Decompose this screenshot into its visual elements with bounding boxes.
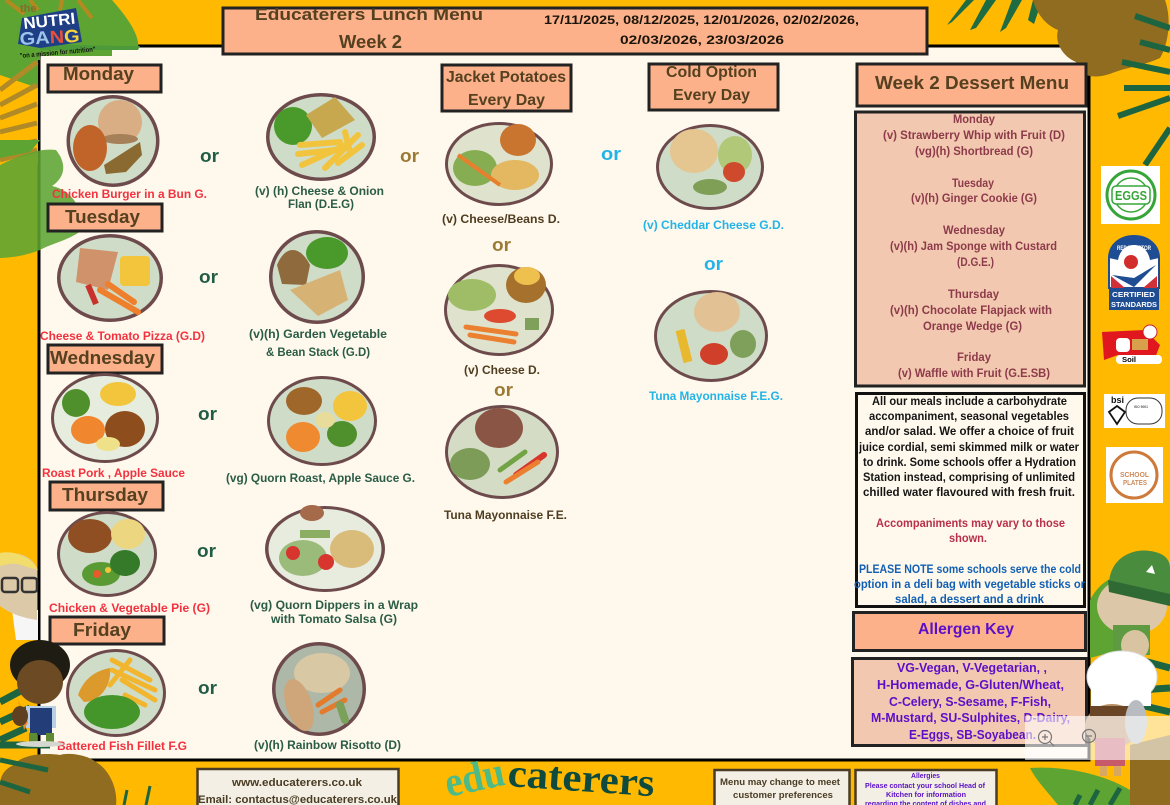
plate: cheese and beans potato xyxy=(445,122,553,206)
panel: dessert list: Thursday xyxy=(948,289,1000,301)
icon: school plates badge: SCHOOL xyxy=(1120,472,1150,479)
footer: menu note: customer preferences xyxy=(733,790,833,800)
heading: Jacket Potatoes: Every Day xyxy=(468,92,545,109)
menu dates: 17/11/2025, 08/12/2025, 12/01/2026, 02/02/2026, xyxy=(544,13,859,27)
panel: dessert list: (v) Strawberry Whip with Fruit (D) xyxy=(883,130,1065,142)
panel: allergen list: VG-Vegan, V-Vegetarian, , xyxy=(897,660,1047,675)
label: battered fish fillet: Battered Fish Fillet F.G xyxy=(57,739,187,753)
icon: zoom out xyxy=(1082,730,1096,742)
plate: chicken and vegetable pie xyxy=(57,511,157,597)
label: quorn dippers: (vg) Quorn Dippers in a Wrap xyxy=(250,598,418,612)
heading: Thursday xyxy=(50,482,163,510)
panel: allergen list: E-Eggs, SB-Soyabean. xyxy=(909,727,1036,742)
logo: the Nutri Gang: NUTRI xyxy=(23,11,76,33)
logo: the Nutri Gang: "on a mission for nutrition" xyxy=(20,46,96,60)
label: garden vegetable stack xyxy=(249,327,387,359)
heading: Wednesday: Wednesday xyxy=(50,348,155,368)
panel: meal information: All our meals include a carbohydrate xyxy=(872,396,1067,408)
label: chicken and vegetable pie: Chicken & Vegetable Pie (G) xyxy=(49,601,210,615)
or: or xyxy=(198,678,217,698)
or: or xyxy=(400,146,419,166)
panel: dessert list: Tuesday xyxy=(952,178,995,190)
label: cheese and beans: (v) Cheese/Beans D. xyxy=(442,212,560,226)
panel: meal information: Station instead, comprising of unlimited xyxy=(863,472,1075,484)
label: roast pork: Roast Pork , Apple Sauce xyxy=(42,466,185,480)
panel: dessert list: (v)(h) Ginger Cookie (G) xyxy=(911,193,1037,205)
footer: allergies note: Kitchen for information xyxy=(886,790,966,799)
panel: allergen list xyxy=(852,658,1086,746)
panel: dessert list: (v)(h) Chocolate Flapjack with xyxy=(890,305,1052,317)
label: garden vegetable stack: & Bean Stack (G.D) xyxy=(266,345,370,359)
panel: dessert list: (vg)(h) Shortbread (G) xyxy=(915,146,1033,158)
week label: Week 2 xyxy=(339,32,402,52)
plate: chicken burger xyxy=(66,95,160,187)
heading: Cold Option: Every Day xyxy=(673,87,750,104)
logo: the Nutri Gang: GANG xyxy=(19,26,80,49)
icon: red tractor badge: RED TRACTOR xyxy=(1117,246,1152,252)
icon: food for life badge xyxy=(1102,325,1162,364)
label: garden vegetable stack: (v)(h) Garden Vegetable xyxy=(249,327,387,341)
panel: meal information: accompaniment, seasonal vegetables xyxy=(869,411,1069,423)
heading: Jacket Potatoes: Jacket Potatoes xyxy=(446,69,566,86)
panel: dessert list: Orange Wedge (G) xyxy=(923,321,1022,333)
label: tuna potato: Tuna Mayonnaise F.E. xyxy=(444,508,567,522)
panel: allergen list: C-Celery, S-Sesame, F-Fish, xyxy=(889,694,1051,709)
panel: meal information: and/or salad. We offer a choice of fruit xyxy=(865,426,1074,438)
decoration: top left tropical leaves xyxy=(0,0,140,258)
panel: dessert list: Friday xyxy=(957,352,992,364)
plate: cheese and onion flan xyxy=(266,93,376,181)
heading: Wednesday xyxy=(48,345,162,373)
heading: allergen key: Allergen Key xyxy=(918,621,1014,638)
label: chicken burger: Chicken Burger in a Bun G. xyxy=(52,187,207,201)
logo: the Nutri Gang: the xyxy=(20,3,36,15)
panel: dessert list: (D.G.E.) xyxy=(957,257,994,269)
plate: battered fish fillet xyxy=(66,649,166,737)
heading: Friday xyxy=(50,617,164,644)
decoration: bottom left leaves xyxy=(0,686,150,805)
or: or xyxy=(494,380,513,400)
menu dates: 02/03/2026, 23/03/2026 xyxy=(620,33,784,47)
plate: cheddar cheese roll xyxy=(656,124,764,210)
panel: meal information: salad, a dessert and a drink xyxy=(895,594,1045,606)
icon: red tractor badge: STANDARDS xyxy=(1111,300,1157,309)
panel: meal information: Accompaniments may vary to those xyxy=(876,518,1065,530)
icon: food for life badge: Soil xyxy=(1122,357,1136,364)
panel: meal information: option in a deli bag with vegetable sticks or xyxy=(854,579,1086,591)
or: or xyxy=(199,267,218,287)
label: cheese potato: (v) Cheese D. xyxy=(464,363,540,377)
plate: quorn dippers xyxy=(265,505,385,592)
overlay: zoom controls xyxy=(1025,716,1170,760)
decoration: bottom right leaves xyxy=(1030,576,1170,805)
heading: Monday: Monday xyxy=(63,64,134,84)
logo: the Nutri Gang xyxy=(18,3,96,60)
label: quorn dippers xyxy=(250,598,418,626)
icon: free range eggs badge xyxy=(1101,166,1160,224)
logo: educaterers: caterers xyxy=(506,750,656,805)
menu dates xyxy=(544,13,859,47)
heading: dessert menu xyxy=(857,64,1086,106)
panel: dessert list: (v) Waffle with Fruit (G.E.SB) xyxy=(898,368,1050,380)
label: cheddar cheese: (v) Cheddar Cheese G.D. xyxy=(643,218,784,232)
plate: roast pork xyxy=(51,373,159,463)
panel: meal information: chilled water flavoured with fresh fruit. xyxy=(863,487,1075,499)
panel: meal information: shown. xyxy=(949,533,987,545)
plate: tuna potato xyxy=(445,405,559,499)
or: or xyxy=(601,144,621,164)
character: blond child xyxy=(0,552,38,640)
label: cheese and onion flan: (v) (h) Cheese & Onion xyxy=(255,184,384,198)
heading: Tuesday: Tuesday xyxy=(65,207,140,227)
plate: tuna roll xyxy=(654,290,768,382)
or: or xyxy=(200,146,219,166)
label: tuna mayonnaise: Tuna Mayonnaise F.E.G. xyxy=(649,389,783,403)
panel: dessert list xyxy=(856,112,1084,386)
icon: free range eggs badge: EGGS xyxy=(1115,188,1147,203)
heading: Monday xyxy=(48,64,161,92)
heading: Cold Option xyxy=(649,64,778,110)
panel: dessert list: Wednesday xyxy=(943,225,1006,237)
icon: school plates badge: PLATES xyxy=(1123,480,1147,487)
icon: red tractor badge: CERTIFIED xyxy=(1112,290,1156,299)
character: chef child xyxy=(1085,651,1157,776)
heading: Friday: Friday xyxy=(73,620,131,640)
panel: main menu background xyxy=(39,46,1089,760)
heading: Cold Option: Cold Option xyxy=(666,64,757,81)
panel: meal information: to drink. Some schools offer a Hydration xyxy=(863,457,1076,469)
panel: meal information: juice cordial, semi skimmed milk or water xyxy=(858,442,1080,454)
character: boy with carrot xyxy=(10,640,70,747)
label: rainbow risotto: (v)(h) Rainbow Risotto (D) xyxy=(254,738,401,752)
footer: website and email: www.educaterers.co.uk xyxy=(231,777,363,789)
footer: allergies note: Allergies xyxy=(911,771,940,780)
heading: dessert menu: Week 2 Dessert Menu xyxy=(875,72,1069,93)
or: or xyxy=(492,235,511,255)
heading: Tuesday xyxy=(48,204,162,231)
plate: cheese potato xyxy=(444,264,554,356)
character: boy with green cap xyxy=(1097,551,1170,660)
footer: allergies note xyxy=(856,770,996,805)
heading: Thursday: Thursday xyxy=(62,485,148,505)
panel: meal information xyxy=(854,394,1086,606)
logo: educaterers xyxy=(441,749,656,805)
heading: Jacket Potatoes xyxy=(442,65,571,111)
decoration: top right leaves xyxy=(947,0,1170,165)
icon: red tractor badge xyxy=(1109,236,1159,310)
plate: quorn roast xyxy=(267,376,377,466)
or: or xyxy=(704,254,723,274)
icon: bsi certification badge: ISO 9001 xyxy=(1134,405,1148,409)
footer: allergies note: Please contact your school Head of xyxy=(865,781,985,790)
heading: allergen key xyxy=(854,612,1086,650)
label: quorn dippers: with Tomato Salsa (G) xyxy=(270,612,397,626)
footer: menu note xyxy=(714,770,850,805)
label: cheese and onion flan xyxy=(255,184,384,211)
plate: garden vegetable stack xyxy=(269,230,365,324)
label: cheese and onion flan: Flan (D.E.G) xyxy=(288,197,354,211)
label: quorn roast: (vg) Quorn Roast, Apple Sauce G. xyxy=(226,471,415,485)
panel: dessert list: (v)(h) Jam Sponge with Custard xyxy=(890,241,1057,253)
icon: school plates badge xyxy=(1106,447,1163,503)
title text: Educaterers Lunch Menu xyxy=(255,6,483,24)
panel: allergen list: H-Homemade, G-Gluten/Wheat, xyxy=(877,677,1064,692)
panel: dessert list: Monday xyxy=(953,114,996,126)
or: or xyxy=(197,541,216,561)
panel: allergen list: M-Mustard, SU-Sulphites, D-Dairy, xyxy=(871,710,1070,725)
heading: title box xyxy=(223,6,927,54)
footer: menu note: Menu may change to meet xyxy=(720,777,840,787)
label: pizza: Cheese & Tomato Pizza (G.D) xyxy=(40,329,205,343)
icon: bsi certification badge: bsi xyxy=(1111,395,1124,405)
panel: meal information: PLEASE NOTE some schools serve the cold xyxy=(859,564,1081,576)
icon: zoom in xyxy=(1038,730,1054,746)
icon: bsi certification badge xyxy=(1104,394,1165,428)
footer: website and email xyxy=(198,769,398,805)
plate: cheese and tomato pizza xyxy=(57,234,163,322)
or: or xyxy=(198,404,217,424)
plate: rainbow risotto xyxy=(272,642,366,736)
